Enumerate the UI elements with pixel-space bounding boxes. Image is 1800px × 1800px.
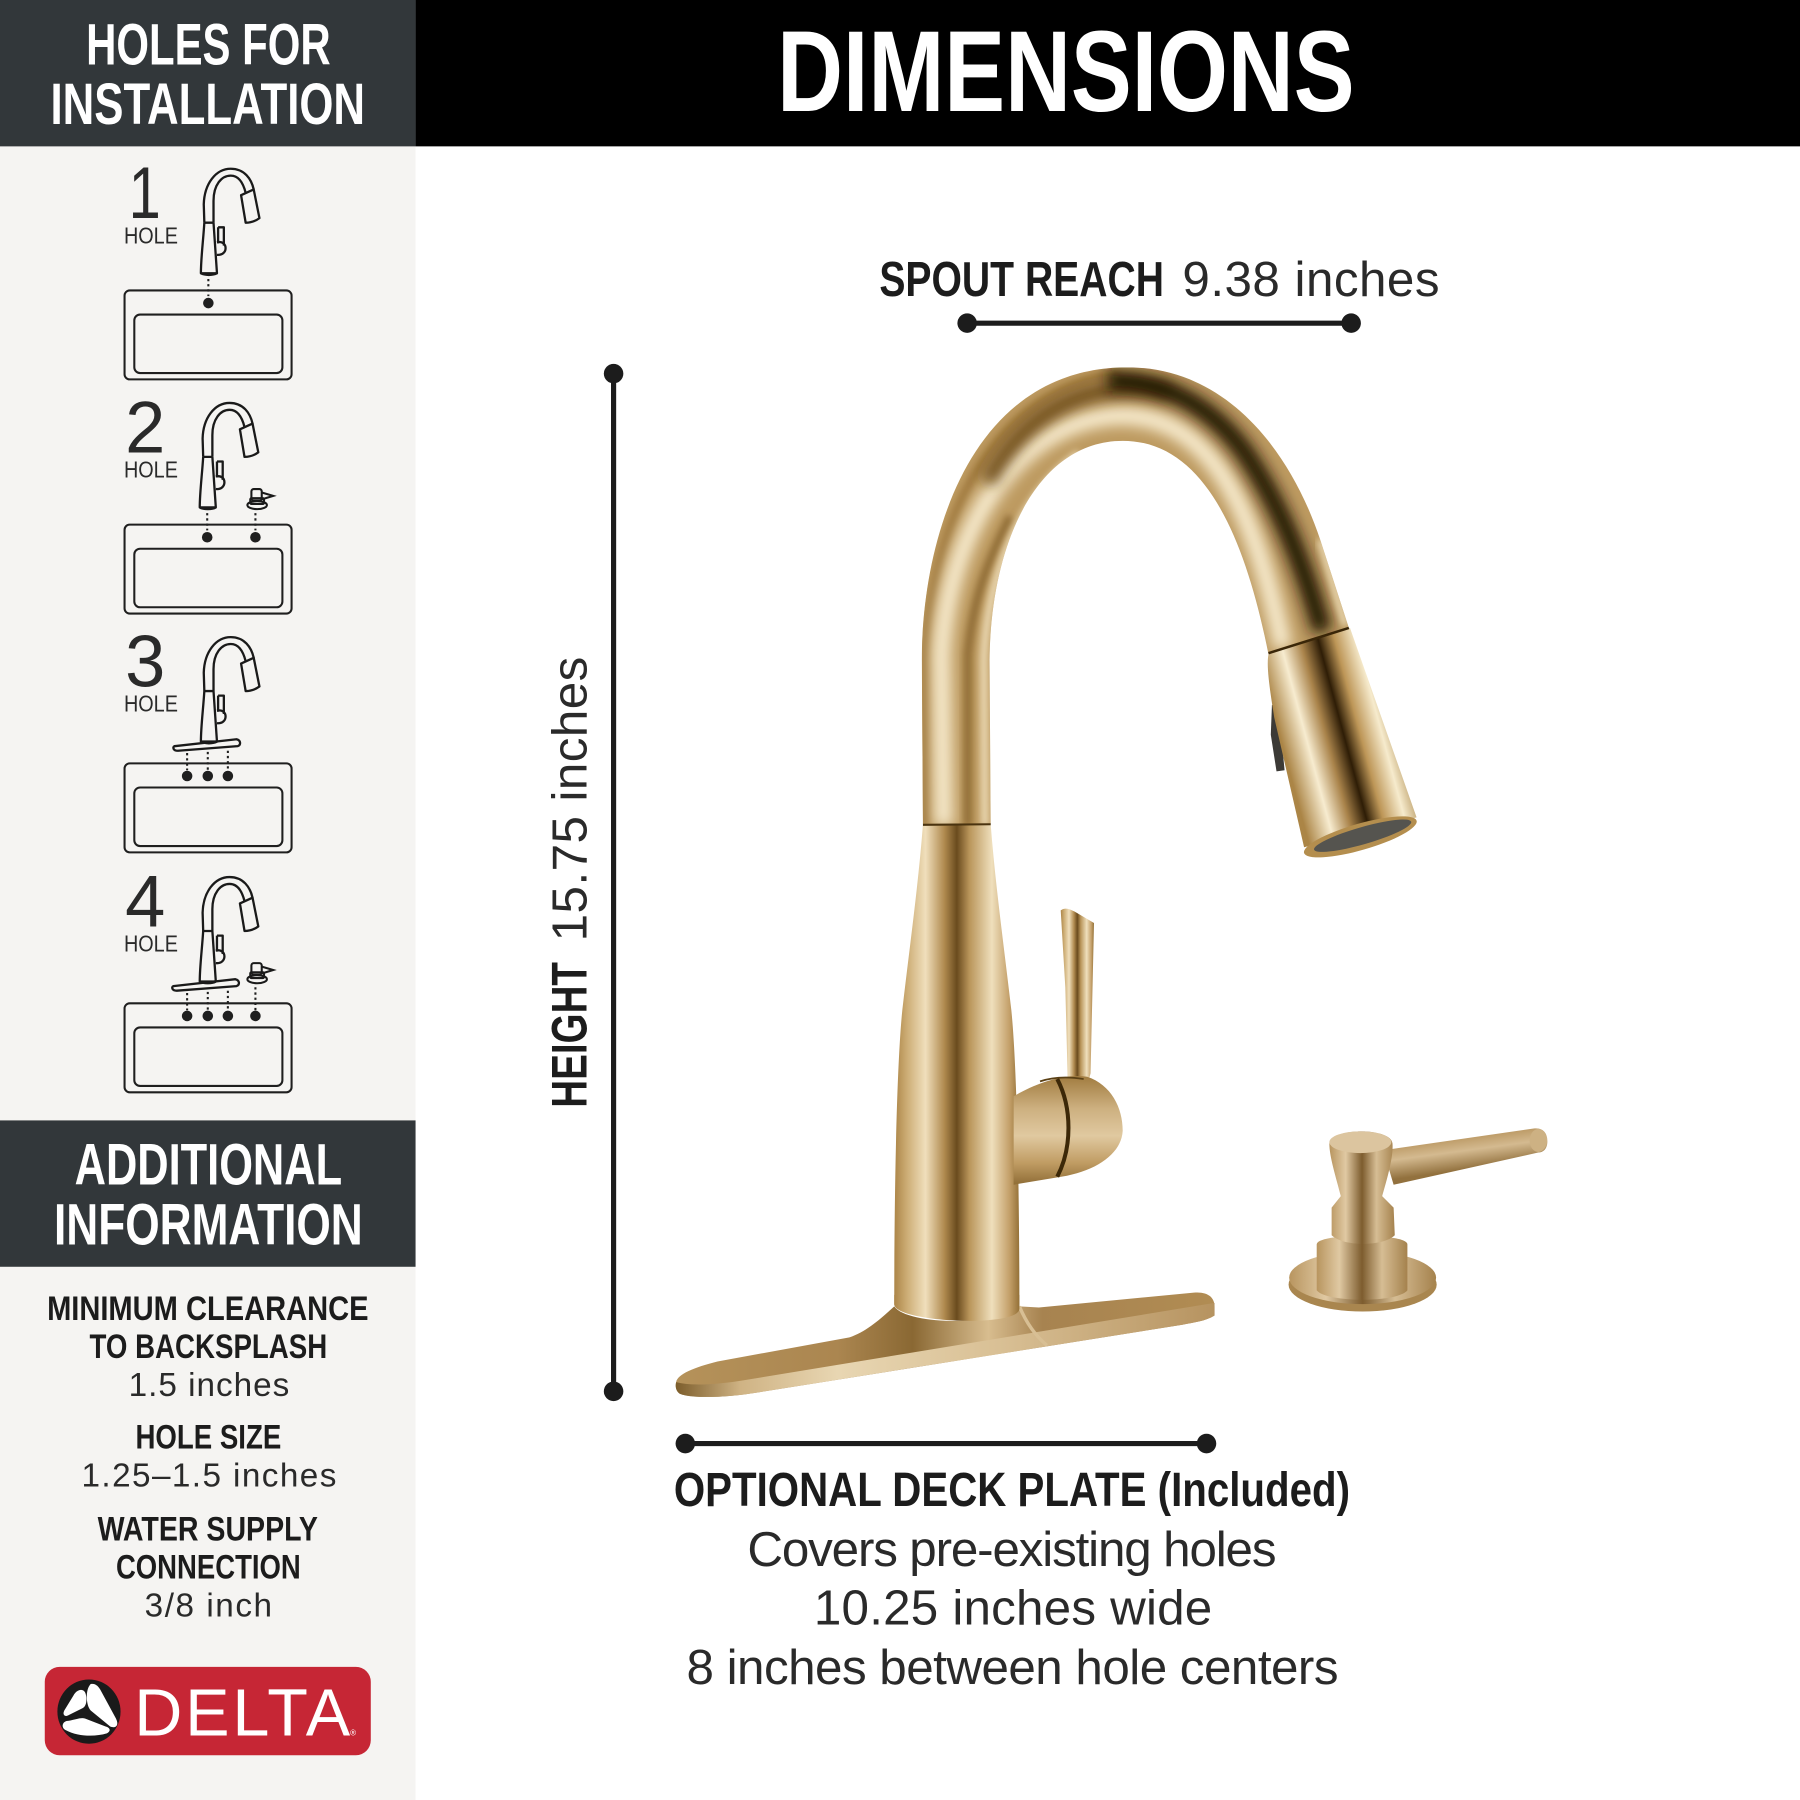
faucet handle lever — [1061, 909, 1094, 1086]
text block: water supply connection: CONNECTION — [116, 1548, 301, 1586]
icon: 3 hole installation: HOLE — [124, 691, 178, 717]
label: spout reach: SPOUT REACH — [879, 252, 1164, 307]
icon: 2 hole installation: 2 — [125, 385, 165, 468]
dimension line: height — [604, 364, 623, 1401]
label: spout reach: 9.38 inches — [1182, 252, 1440, 307]
icon: 2 hole installation: HOLE — [124, 457, 178, 483]
text block: hole size — [82, 1419, 336, 1495]
soap dispenser collar — [1317, 1236, 1407, 1300]
icon: 1 hole installation: 1 — [129, 151, 161, 234]
header: additional information: INFORMATION — [54, 1192, 363, 1257]
deck plate — [676, 1292, 1215, 1397]
label: height — [541, 657, 598, 1108]
header: dimensions: DIMENSIONS — [777, 8, 1355, 136]
text block: minimum clearance: MINIMUM CLEARANCE — [47, 1290, 368, 1328]
dimension line: deck plate — [676, 1434, 1216, 1453]
header: holes for installation: INSTALLATION — [51, 72, 365, 137]
faucet spray head — [1268, 628, 1417, 847]
icon: 2 hole installation — [124, 385, 292, 614]
label: spout reach — [879, 252, 1440, 307]
text block: optional deck plate — [674, 1463, 1350, 1695]
text block: hole size: 1.25–1.5 inches — [82, 1458, 336, 1495]
header: holes for installation: HOLES FOR — [86, 12, 331, 77]
faucet gooseneck — [922, 367, 1349, 824]
icon: 3 hole installation — [124, 619, 292, 852]
header: holes for installation — [0, 0, 416, 146]
text block: optional deck plate: 8 inches between hole centers — [686, 1640, 1339, 1695]
text block: hole size: HOLE SIZE — [135, 1419, 281, 1457]
faucet spray lever — [1271, 705, 1285, 771]
logo: delta: ® — [350, 1729, 356, 1738]
text block: water supply connection: WATER SUPPLY — [98, 1511, 318, 1549]
soap dispenser arm — [1383, 1128, 1547, 1185]
faucet lower body — [894, 824, 1019, 1319]
text block: minimum clearance — [47, 1290, 368, 1404]
text block: minimum clearance: 1.5 inches — [129, 1367, 289, 1404]
logo: delta: DELTA — [134, 1677, 351, 1751]
dimension line: spout reach — [957, 313, 1361, 333]
icon: 1 hole installation: HOLE — [124, 222, 178, 248]
header: dimensions — [416, 0, 1800, 146]
text block: optional deck plate: 10.25 inches wide — [814, 1580, 1212, 1635]
soap dispenser base — [1289, 1258, 1437, 1312]
text block: water supply connection — [98, 1511, 318, 1624]
icon: 4 hole installation: 4 — [125, 859, 165, 942]
panel: left sidebar — [0, 0, 416, 1800]
icon: 4 hole installation: HOLE — [124, 931, 178, 957]
faucet aerator — [1300, 808, 1420, 866]
text block: minimum clearance: TO BACKSPLASH — [90, 1328, 327, 1366]
text block: water supply connection: 3/8 inch — [145, 1587, 272, 1624]
image: soap dispenser — [1289, 1128, 1547, 1312]
text block: optional deck plate: OPTIONAL DECK PLATE (Included) — [674, 1463, 1350, 1517]
logo: delta — [45, 1667, 371, 1755]
header: additional information — [0, 1120, 416, 1267]
header: additional information: ADDITIONAL — [75, 1133, 342, 1198]
image: faucet — [676, 356, 1420, 1397]
icon: 3 hole installation: 3 — [125, 619, 165, 702]
faucet handle hub — [1014, 1076, 1123, 1185]
soap dispenser stem — [1329, 1131, 1395, 1244]
faucet collar seam — [923, 823, 991, 826]
label: height: 15.75 inches — [543, 657, 598, 941]
text block: optional deck plate: Covers pre-existing holes — [747, 1522, 1277, 1577]
icon: 4 hole installation — [124, 859, 292, 1092]
icon: 1 hole installation — [124, 151, 292, 379]
label: height: HEIGHT — [541, 962, 598, 1108]
